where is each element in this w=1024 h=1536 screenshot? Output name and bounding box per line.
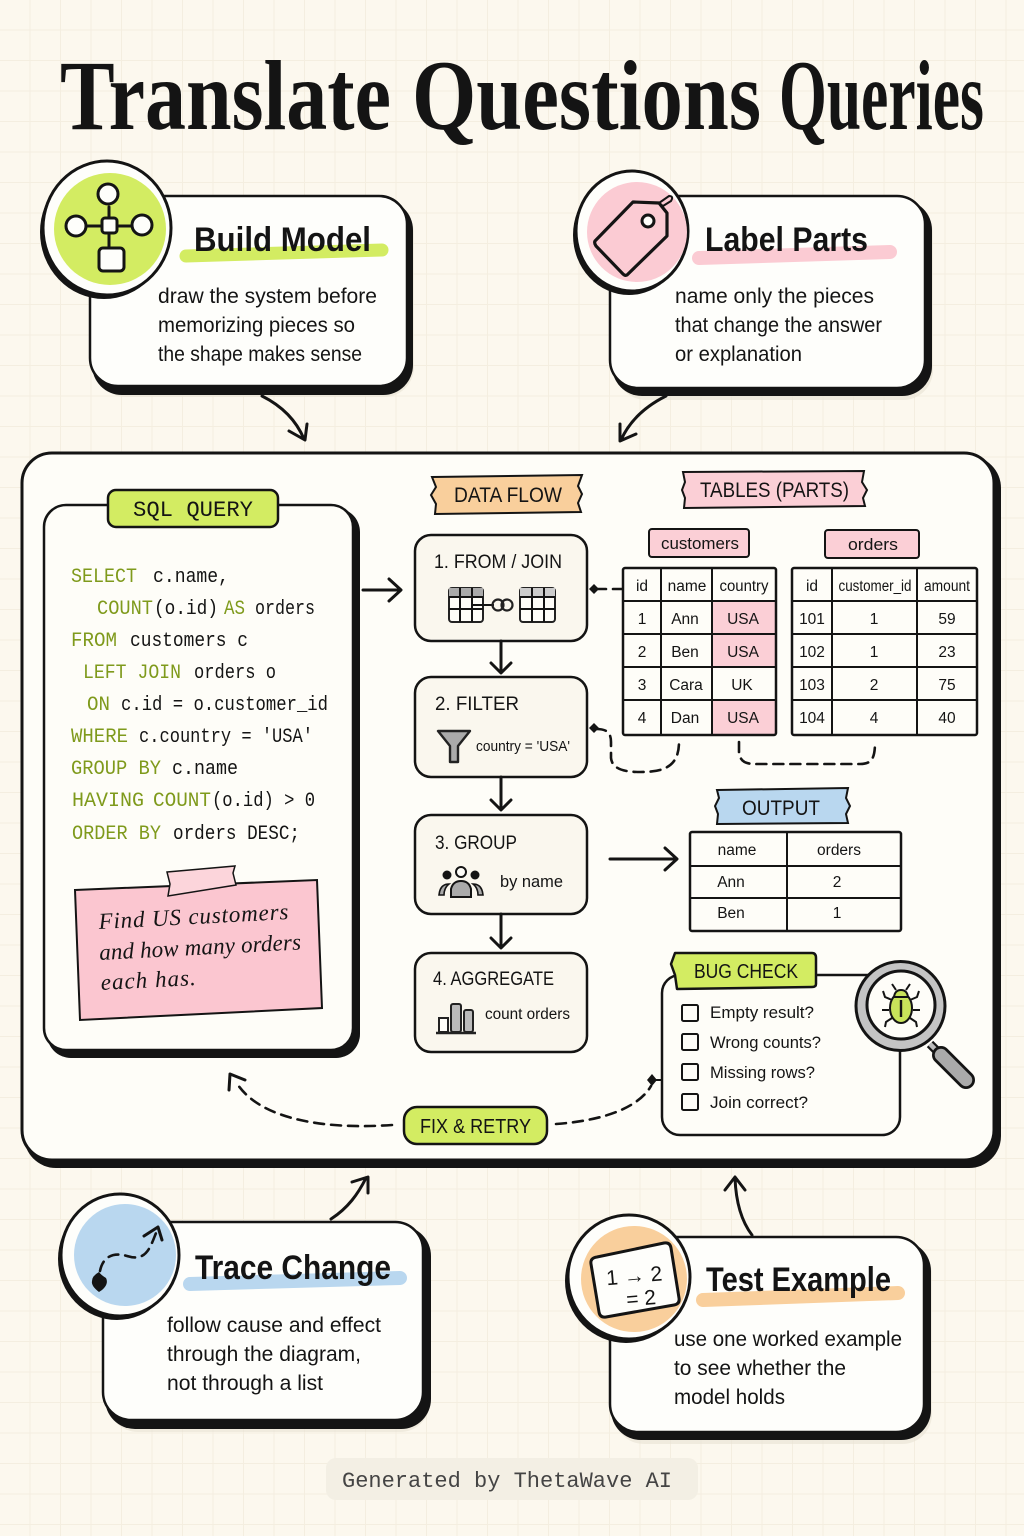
table: orders: 103 xyxy=(799,677,825,694)
label: DATA FLOW xyxy=(431,475,582,514)
table: customers: country xyxy=(720,578,769,595)
code: SQL statement: GROUP BY xyxy=(71,758,161,781)
checklist: Empty result? xyxy=(710,1003,814,1022)
checklist: Join correct? xyxy=(710,1093,808,1112)
table: orders: 101 xyxy=(799,611,825,628)
text: Test Example body: model holds xyxy=(674,1386,785,1409)
text: Label Parts body: name only the pieces xyxy=(675,285,874,308)
code: SQL statement: FROM xyxy=(71,630,117,653)
table: orders: customer_id xyxy=(838,578,912,595)
icon: magnifier with bug xyxy=(856,962,966,1080)
step: FILTER: 2. FILTER xyxy=(435,694,519,715)
label: TABLES (PARTS) xyxy=(682,471,867,508)
table: customers: id xyxy=(636,578,648,595)
panel: SQL query xyxy=(44,490,360,1058)
code: SQL statement: (o.id) xyxy=(154,598,218,621)
table: customers: 2 xyxy=(638,644,646,661)
label: customers: customers xyxy=(661,534,739,553)
text: Trace Change body: through the diagram, xyxy=(167,1343,361,1366)
label: FIX & RETRY xyxy=(404,1107,547,1144)
arrow: step 3 to 4 xyxy=(491,914,511,948)
table: orders: 40 xyxy=(938,710,956,727)
text: Test Example body: use one worked example xyxy=(674,1328,902,1351)
table: orders: 59 xyxy=(938,611,956,628)
label: customers xyxy=(649,529,749,557)
text: Build Model body xyxy=(158,285,377,366)
table: customers: Ann xyxy=(671,611,699,628)
heading: Trace Change: Trace Change xyxy=(195,1249,391,1287)
code: SQL statement: customers c xyxy=(130,630,248,653)
text: Build Model body: the shape makes sense xyxy=(158,343,362,366)
panel: Build Model xyxy=(40,161,414,397)
arrow: Label Parts to main xyxy=(620,396,666,441)
note: question sticky: Find US customers xyxy=(97,899,289,934)
step: GROUP: 3. GROUP xyxy=(435,833,517,854)
table: orders: 1 xyxy=(870,611,878,628)
step: GROUP xyxy=(415,815,587,914)
text: Build Model body: draw the system before xyxy=(158,285,377,308)
label: SQL QUERY xyxy=(108,490,278,527)
step: GROUP: by name xyxy=(500,873,563,891)
label: OUTPUT: OUTPUT xyxy=(742,797,820,820)
arrow: Build Model to main xyxy=(262,396,307,440)
connector: customers to orders xyxy=(739,742,875,764)
label: DATA FLOW: DATA FLOW xyxy=(454,484,562,507)
table: customers: USA xyxy=(727,611,760,628)
code: SQL statement: c.id = o.customer_id xyxy=(121,694,328,717)
table: customers: Cara xyxy=(669,677,703,694)
text: Build Model body: memorizing pieces so xyxy=(158,314,355,337)
arrow: Trace Change to main xyxy=(331,1177,368,1219)
table: orders: 102 xyxy=(799,644,825,661)
heading: Test Example: Test Example xyxy=(706,1261,891,1299)
note: question sticky: and how many orders xyxy=(99,929,302,965)
table: customers: USA xyxy=(727,710,760,727)
panel: bug check xyxy=(662,953,966,1135)
label: BUG CHECK xyxy=(671,953,816,989)
table: orders: amount xyxy=(924,578,971,595)
table: customers: USA xyxy=(727,644,760,661)
title xyxy=(60,40,984,151)
heading: Build Model: Build Model xyxy=(194,221,371,259)
arrow: retry to SQL xyxy=(229,1074,392,1126)
panel: Label Parts xyxy=(573,171,933,400)
text: Trace Change body: not through a list xyxy=(167,1372,323,1395)
icon: bar chart xyxy=(436,1004,476,1033)
icon: path xyxy=(58,1194,179,1320)
label: BUG CHECK: BUG CHECK xyxy=(694,961,799,983)
table: output: Ann xyxy=(717,874,745,891)
table: orders: id xyxy=(806,578,818,595)
arrow: retry to bug check xyxy=(556,1074,662,1124)
note: question sticky xyxy=(75,866,322,1020)
table: orders: 23 xyxy=(938,644,956,661)
note: question sticky: each has. xyxy=(100,965,196,995)
step: FILTER xyxy=(415,677,587,777)
code: SQL statement: orders o xyxy=(194,662,276,685)
table: customers: 1 xyxy=(638,611,646,628)
table: orders: 75 xyxy=(938,677,956,694)
code: SQL statement: SELECT xyxy=(71,566,137,589)
panel: main diagram xyxy=(22,453,1001,1168)
table: output: orders xyxy=(817,842,861,859)
table: output: name xyxy=(718,842,756,859)
icon: funnel xyxy=(438,731,470,762)
checklist xyxy=(682,1003,821,1112)
step: AGGREGATE xyxy=(415,953,587,1052)
title: Questions xyxy=(412,40,761,151)
label: OUTPUT xyxy=(715,788,850,824)
panel: Test Example xyxy=(565,1215,932,1444)
code: SQL statement: c.name xyxy=(172,758,238,781)
table: orders: 2 xyxy=(870,677,878,694)
code: SQL statement: COUNT xyxy=(153,790,211,813)
title: Translate xyxy=(60,40,391,151)
panel: Trace Change xyxy=(58,1194,431,1432)
step: FROM / JOIN xyxy=(415,535,587,641)
text: Test Example body xyxy=(674,1328,902,1409)
table: customers: 3 xyxy=(638,677,646,694)
icon: joined tables xyxy=(449,588,555,622)
checklist: Wrong counts? xyxy=(710,1033,821,1052)
code: SQL statement: orders DESC; xyxy=(173,823,300,846)
code: SQL statement: (o.id) > 0 xyxy=(212,790,315,813)
code: SQL statement: orders xyxy=(255,598,315,621)
label: orders xyxy=(825,530,919,558)
text: Label Parts body: or explanation xyxy=(675,343,802,366)
step: AGGREGATE: 4. AGGREGATE xyxy=(433,969,554,990)
icon: worked example card xyxy=(565,1215,690,1343)
text: Trace Change body: follow cause and effect xyxy=(167,1314,381,1337)
text: Label Parts body: that change the answer xyxy=(675,314,882,337)
table: orders xyxy=(792,568,977,735)
heading: Label Parts: Label Parts xyxy=(705,221,868,259)
table: customers xyxy=(623,568,776,735)
table: output: Ben xyxy=(717,905,745,922)
table: customers: name xyxy=(668,578,706,595)
code: SQL statement: ON xyxy=(87,694,110,717)
text: Test Example body: to see whether the xyxy=(674,1357,846,1380)
table: customers: 4 xyxy=(638,710,647,727)
code: SQL statement: ORDER BY xyxy=(72,823,161,846)
icon: worked example card: 1 → 2 xyxy=(605,1262,663,1290)
table: output: 2 xyxy=(833,874,841,891)
footer xyxy=(326,1458,698,1500)
text: Label Parts body xyxy=(675,285,882,366)
label: orders: orders xyxy=(848,535,898,554)
table: orders: 104 xyxy=(799,710,825,727)
step: FILTER: country = 'USA' xyxy=(476,739,570,755)
connector: country to filter xyxy=(589,723,679,772)
arrow: Test Example to main xyxy=(725,1177,752,1235)
arrow: group to output xyxy=(610,848,677,870)
connector: customers to join xyxy=(589,584,622,594)
label: SQL QUERY: SQL QUERY xyxy=(133,498,253,523)
footer: Generated by ThetaWave AI xyxy=(342,1469,672,1494)
step: AGGREGATE: count orders xyxy=(485,1006,570,1023)
table: customers: UK xyxy=(731,677,753,694)
code: SQL statement: LEFT JOIN xyxy=(83,662,181,685)
table: customers: Dan xyxy=(671,710,699,727)
code: SQL statement: c.country = 'USA' xyxy=(139,726,313,749)
code: SQL statement: WHERE xyxy=(71,726,128,749)
table: output: 1 xyxy=(833,905,841,922)
icon: tag xyxy=(573,171,688,295)
code: SQL statement xyxy=(71,566,328,846)
arrow: step 2 to 3 xyxy=(491,777,511,810)
label: FIX & RETRY: FIX & RETRY xyxy=(420,1116,531,1138)
table: orders: 4 xyxy=(870,710,879,727)
arrow: SQL to data flow xyxy=(363,579,401,601)
text: Trace Change body xyxy=(167,1314,381,1395)
step: FROM / JOIN: 1. FROM / JOIN xyxy=(434,552,562,573)
code: SQL statement: AS xyxy=(224,598,245,621)
arrow: step 1 to 2 xyxy=(491,641,511,673)
code: SQL statement: c.name, xyxy=(153,566,229,589)
checklist: Missing rows? xyxy=(710,1063,815,1082)
code: SQL statement: HAVING xyxy=(72,790,144,813)
table: orders: 1 xyxy=(870,644,878,661)
table: output xyxy=(690,832,901,931)
label: TABLES (PARTS): TABLES (PARTS) xyxy=(700,479,849,502)
icon: people xyxy=(439,867,483,897)
icon: node model xyxy=(40,161,171,299)
table: customers: Ben xyxy=(671,644,699,661)
icon: worked example card: = 2 xyxy=(625,1286,657,1312)
code: SQL statement: COUNT xyxy=(97,598,153,621)
